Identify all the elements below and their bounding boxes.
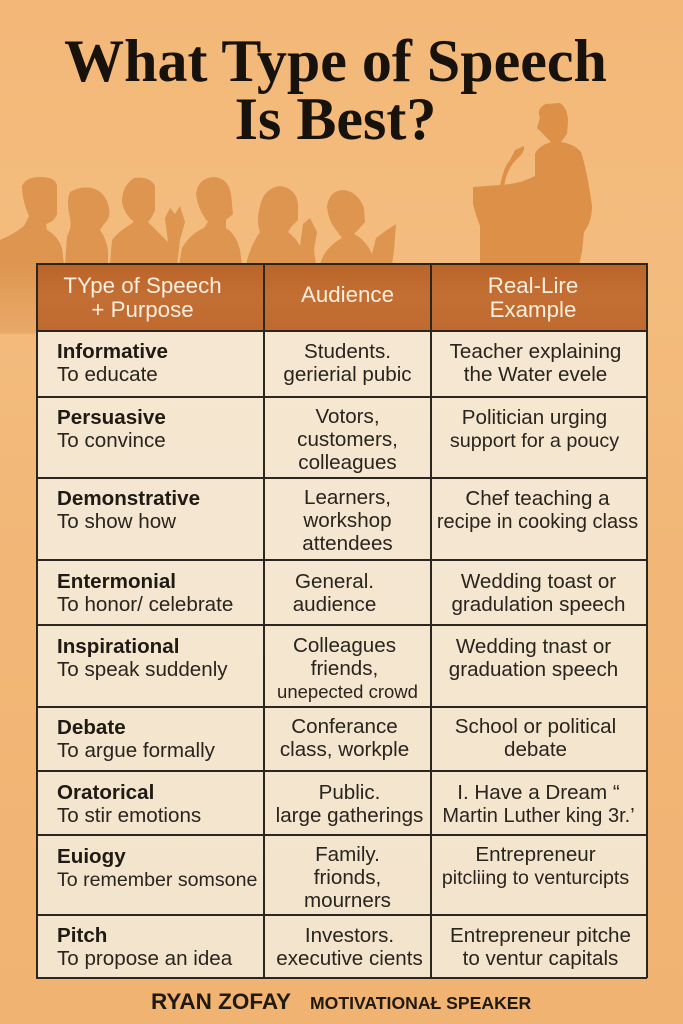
row: informative type: To educate xyxy=(57,363,158,386)
row: persuasive type xyxy=(57,406,166,452)
row: persuasive audience: customers, xyxy=(297,428,398,451)
row: demonstrative type: Demonstrative xyxy=(57,487,200,510)
row: pitch example xyxy=(450,924,631,970)
row: eulogy audience xyxy=(304,843,391,912)
person 4 xyxy=(179,177,242,265)
row: demonstrative audience: workshop xyxy=(303,509,392,532)
row: debate type xyxy=(57,716,215,762)
row: inspirational example: graduation speech xyxy=(449,658,618,681)
header row background xyxy=(37,264,646,330)
row: persuasive example: support for a poucy xyxy=(450,430,619,452)
row: pitch type xyxy=(57,924,232,970)
row: entermonial example xyxy=(451,570,626,616)
row: inspirational audience xyxy=(277,634,418,702)
row: informative audience: Students. xyxy=(304,340,391,363)
row: entermonial type xyxy=(57,570,233,616)
row: entermonial example: Wedding toast or xyxy=(461,570,616,593)
row: debate audience: Conferance xyxy=(291,715,398,738)
row: demonstrative audience: Learners, xyxy=(304,486,391,509)
row: eulogy type: To remember somsone xyxy=(57,869,257,891)
row: eulogy example: Entrepreneur xyxy=(475,843,596,866)
row: demonstrative type xyxy=(57,487,200,533)
row: inspirational example xyxy=(449,635,618,681)
header: example: Example xyxy=(490,297,576,322)
row: persuasive audience: Votors, xyxy=(315,405,380,428)
row: inspirational audience: unepected crowd xyxy=(277,681,418,702)
row: inspirational type xyxy=(57,635,228,681)
row: demonstrative example: Chef teaching a xyxy=(465,487,610,510)
row: oratorical type xyxy=(57,781,201,827)
header: type of speech: TYpe of Speech xyxy=(63,273,222,298)
row: oratorical type: Oratorical xyxy=(57,781,154,804)
title: Is Best? xyxy=(235,86,436,152)
row: entermonial audience xyxy=(293,570,376,616)
audience silhouettes xyxy=(0,177,396,265)
person 5 xyxy=(246,186,317,265)
header: audience: Audience xyxy=(301,282,394,307)
row: pitch example: Entrepreneur pitche xyxy=(450,924,631,947)
row: oratorical audience: Public. xyxy=(319,781,380,804)
row: eulogy audience: frionds, xyxy=(314,866,381,889)
row: informative type: Informative xyxy=(57,340,168,363)
audience and speaker silhouette xyxy=(0,103,592,263)
row: debate example: debate xyxy=(504,738,567,761)
row: pitch example: to ventur capitals xyxy=(463,947,618,970)
row: informative audience xyxy=(283,340,412,386)
table body background xyxy=(37,331,646,977)
person 3 xyxy=(110,178,185,265)
left edge background smudge xyxy=(0,245,37,335)
row: inspirational audience: Colleagues xyxy=(293,634,396,657)
person 1 xyxy=(0,177,64,265)
row: persuasive example xyxy=(450,406,620,452)
podium and speaker body xyxy=(473,103,592,265)
row: demonstrative audience xyxy=(302,486,393,555)
row: entermonial type: Entermonial xyxy=(57,570,176,593)
row: persuasive audience xyxy=(297,405,398,474)
row: oratorical audience: large gatherings xyxy=(276,804,423,827)
row: eulogy type xyxy=(57,845,257,891)
row: oratorical audience xyxy=(276,781,423,827)
row: inspirational type: To speak suddenly xyxy=(57,658,228,681)
row: entermonial type: To honor/ celebrate xyxy=(57,593,233,616)
row: informative example: Teacher explaining xyxy=(450,340,621,363)
row: persuasive audience: colleagues xyxy=(298,451,397,474)
row: inspirational type: Inspirational xyxy=(57,635,179,658)
row: informative audience: gerierial pubic xyxy=(283,363,412,386)
row: debate type: To argue formally xyxy=(57,739,215,762)
row: pitch audience: Investors. xyxy=(305,924,394,947)
row: persuasive example: Politician urging xyxy=(462,406,607,429)
header: example: Real-Lire xyxy=(488,273,578,298)
row: debate audience: class, workple xyxy=(280,738,409,761)
footer credit: RYAN ZOFAY xyxy=(151,989,291,1014)
row: pitch audience xyxy=(276,924,423,970)
row: pitch type: To propose an idea xyxy=(57,947,232,970)
footer role: MOTIVATIONAŁ SPEAKER xyxy=(310,993,531,1013)
row: informative example: the Water evele xyxy=(464,363,607,386)
row: entermonial example: gradulation speech xyxy=(451,593,626,616)
row: debate example xyxy=(455,715,616,761)
row: eulogy audience: mourners xyxy=(304,889,391,912)
microphone xyxy=(500,146,524,187)
row: debate audience xyxy=(280,715,409,761)
row: pitch audience: executive cients xyxy=(276,947,423,970)
row: debate example: School or political xyxy=(455,715,616,738)
row: pitch type: Pitch xyxy=(57,924,107,947)
row: oratorical example xyxy=(442,781,635,827)
row: entermonial audience: audience xyxy=(293,593,376,616)
header: type of speech xyxy=(63,273,222,322)
row: demonstrative example xyxy=(437,487,638,533)
row: inspirational example: Wedding tnast or xyxy=(456,635,611,658)
speaker and podium silhouette xyxy=(473,103,592,265)
row: oratorical example: I. Have a Dream “ xyxy=(457,781,620,804)
person 6 xyxy=(320,190,396,265)
row: persuasive type: Persuasive xyxy=(57,406,166,429)
row: demonstrative example: recipe in cooking class xyxy=(437,511,638,533)
person 2 xyxy=(65,188,109,265)
header: example xyxy=(488,273,578,322)
row: informative type xyxy=(57,340,168,386)
row: informative example xyxy=(450,340,621,386)
row: eulogy type: Euiogy xyxy=(57,845,126,868)
row: inspirational audience: friends, xyxy=(311,657,378,680)
title: What Type of Speech xyxy=(64,28,607,94)
row: oratorical type: To stir emotions xyxy=(57,804,201,827)
row: eulogy example xyxy=(442,843,629,889)
row: entermonial audience: General. xyxy=(295,570,374,593)
row: demonstrative audience: attendees xyxy=(302,532,393,555)
header: type of speech: + Purpose xyxy=(91,297,194,322)
row: persuasive type: To convince xyxy=(57,429,166,452)
row: oratorical example: Martin Luther king 3r.’ xyxy=(442,805,635,827)
row: debate type: Debate xyxy=(57,716,126,739)
row: demonstrative type: To show how xyxy=(57,510,176,533)
title xyxy=(64,28,607,152)
row: eulogy example: pitcliing to venturcipts xyxy=(442,867,629,889)
row: eulogy audience: Family. xyxy=(315,843,380,866)
